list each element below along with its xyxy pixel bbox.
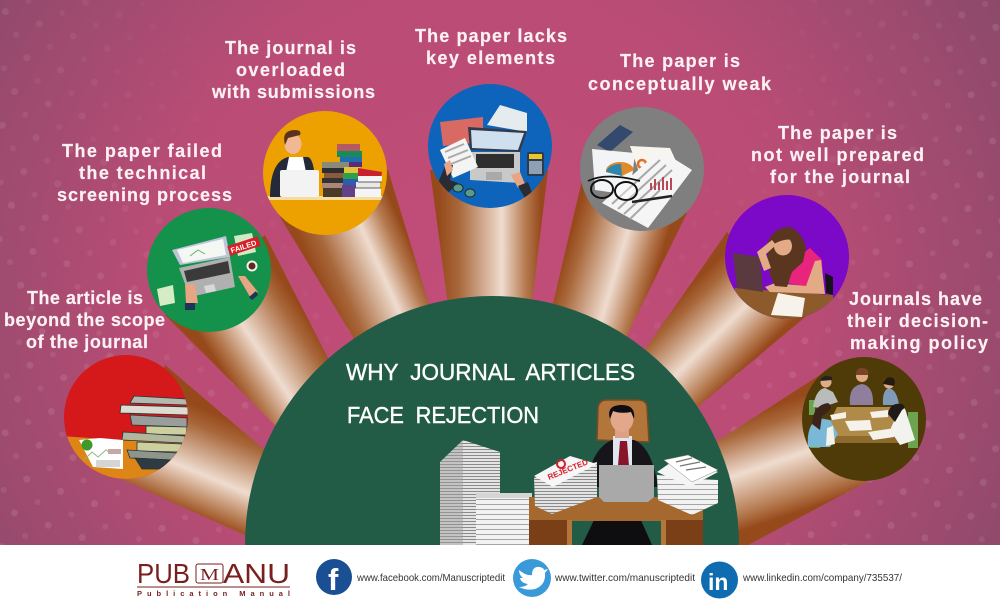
icon: facebook: f <box>328 562 339 597</box>
panel: overloaded journal <box>263 111 387 235</box>
panel: not well prepared <box>725 195 849 325</box>
illustration: rejected paper stack <box>534 456 597 514</box>
logo: Pubmanu: PUB <box>137 558 190 589</box>
panel: lacks key elements <box>428 84 552 208</box>
icon: person at laptop <box>270 130 319 197</box>
illustration: editor at desk <box>529 400 703 545</box>
twitter link: www.twitter.com/manuscriptedit <box>554 572 695 584</box>
heading: beyond the scope: The article is <box>27 288 143 308</box>
illustration: short paper stack <box>476 493 532 545</box>
icon: open laptop <box>468 127 527 183</box>
panel: central dome <box>245 296 739 545</box>
heading: conceptually weak: The paper is <box>620 51 740 71</box>
heading: technical screening: The paper failed <box>62 141 222 161</box>
heading: overloaded: with submissions <box>211 82 375 102</box>
icon: linkedin: in <box>708 569 728 595</box>
icon: report pages <box>79 438 123 469</box>
illustration: reviewed paper stack <box>657 455 718 515</box>
icon: rejected stamp on page: FAILED <box>229 238 258 255</box>
icon: calculator <box>597 125 633 152</box>
beams radiating from the central dome <box>123 170 870 560</box>
icon: coffee and hands <box>157 260 258 310</box>
icon: laptop <box>172 236 235 297</box>
icon: twitter <box>513 559 551 597</box>
heading: key elements: The paper lacks <box>415 26 567 46</box>
heading: conceptually weak: conceptually weak <box>588 74 772 94</box>
icon: laptop <box>733 253 763 292</box>
panel: conceptually weak <box>580 107 704 231</box>
heading: decision-making policy: making policy <box>850 333 988 353</box>
illustration: rejected paper stack: REJECTED <box>546 457 590 482</box>
heading: decision-making policy: Journals have <box>849 289 982 309</box>
icon: book piles <box>322 144 382 197</box>
panel: beyond the scope <box>64 355 188 479</box>
heading: overloaded <box>211 38 375 102</box>
heading: overloaded: The journal is <box>225 38 356 58</box>
title: WHY JOURNAL ARTICLES <box>346 359 635 385</box>
logo: Pubmanu: Publication Manual <box>137 589 290 598</box>
icon: chart sheet <box>487 105 527 132</box>
heading: technical screening: the technical <box>79 163 206 183</box>
icon: hands and glasses <box>437 160 534 200</box>
heading: key elements <box>415 26 567 68</box>
illustration: tall paper stack <box>440 440 500 545</box>
linkedin link: www.linkedin.com/company/735537/ <box>742 572 902 584</box>
icon: linkedin <box>701 562 738 598</box>
heading: overloaded: overloaded <box>236 60 345 80</box>
icon: stack of books <box>120 396 188 469</box>
heading: beyond the scope: of the journal <box>26 332 148 352</box>
icon: glasses and pen <box>588 176 672 202</box>
icon: meeting team <box>808 368 918 448</box>
icon: paper in hand <box>440 138 478 178</box>
heading: technical screening <box>57 141 232 205</box>
panel: failed technical screening <box>147 208 271 332</box>
heading: key elements: key elements <box>426 48 555 68</box>
heading: beyond the scope <box>4 288 165 352</box>
heading: beyond the scope: beyond the scope <box>4 310 165 330</box>
heading: conceptually weak <box>588 51 772 94</box>
heading: not well prepared: The paper is <box>778 123 897 143</box>
icon: facebook <box>316 559 352 597</box>
heading: decision-making policy <box>847 289 988 353</box>
heading: not well prepared: not well prepared <box>751 145 924 165</box>
heading: not well prepared <box>751 123 924 187</box>
facebook link: www.facebook.com/Manuscriptedit <box>356 572 505 584</box>
footer <box>0 545 1000 600</box>
icon: papers on table <box>826 410 895 446</box>
heading: not well prepared: for the journal <box>770 167 910 187</box>
heading: technical screening: screening process <box>57 185 232 205</box>
logo: Pubmanu: ANU <box>223 558 290 589</box>
logo: Pubmanu: M <box>200 565 219 584</box>
icon: notebook <box>440 117 483 146</box>
title: FACE REJECTION <box>347 402 539 428</box>
icon: scattered reports <box>592 146 692 228</box>
icon: calculator <box>527 152 544 176</box>
icon: loose pages <box>771 293 805 317</box>
title <box>346 359 635 428</box>
logo: Pubmanu <box>137 558 290 598</box>
panel: decision-making policy <box>802 357 926 481</box>
icon: tired student <box>757 227 833 295</box>
heading: decision-making policy: their decision- <box>847 311 988 331</box>
